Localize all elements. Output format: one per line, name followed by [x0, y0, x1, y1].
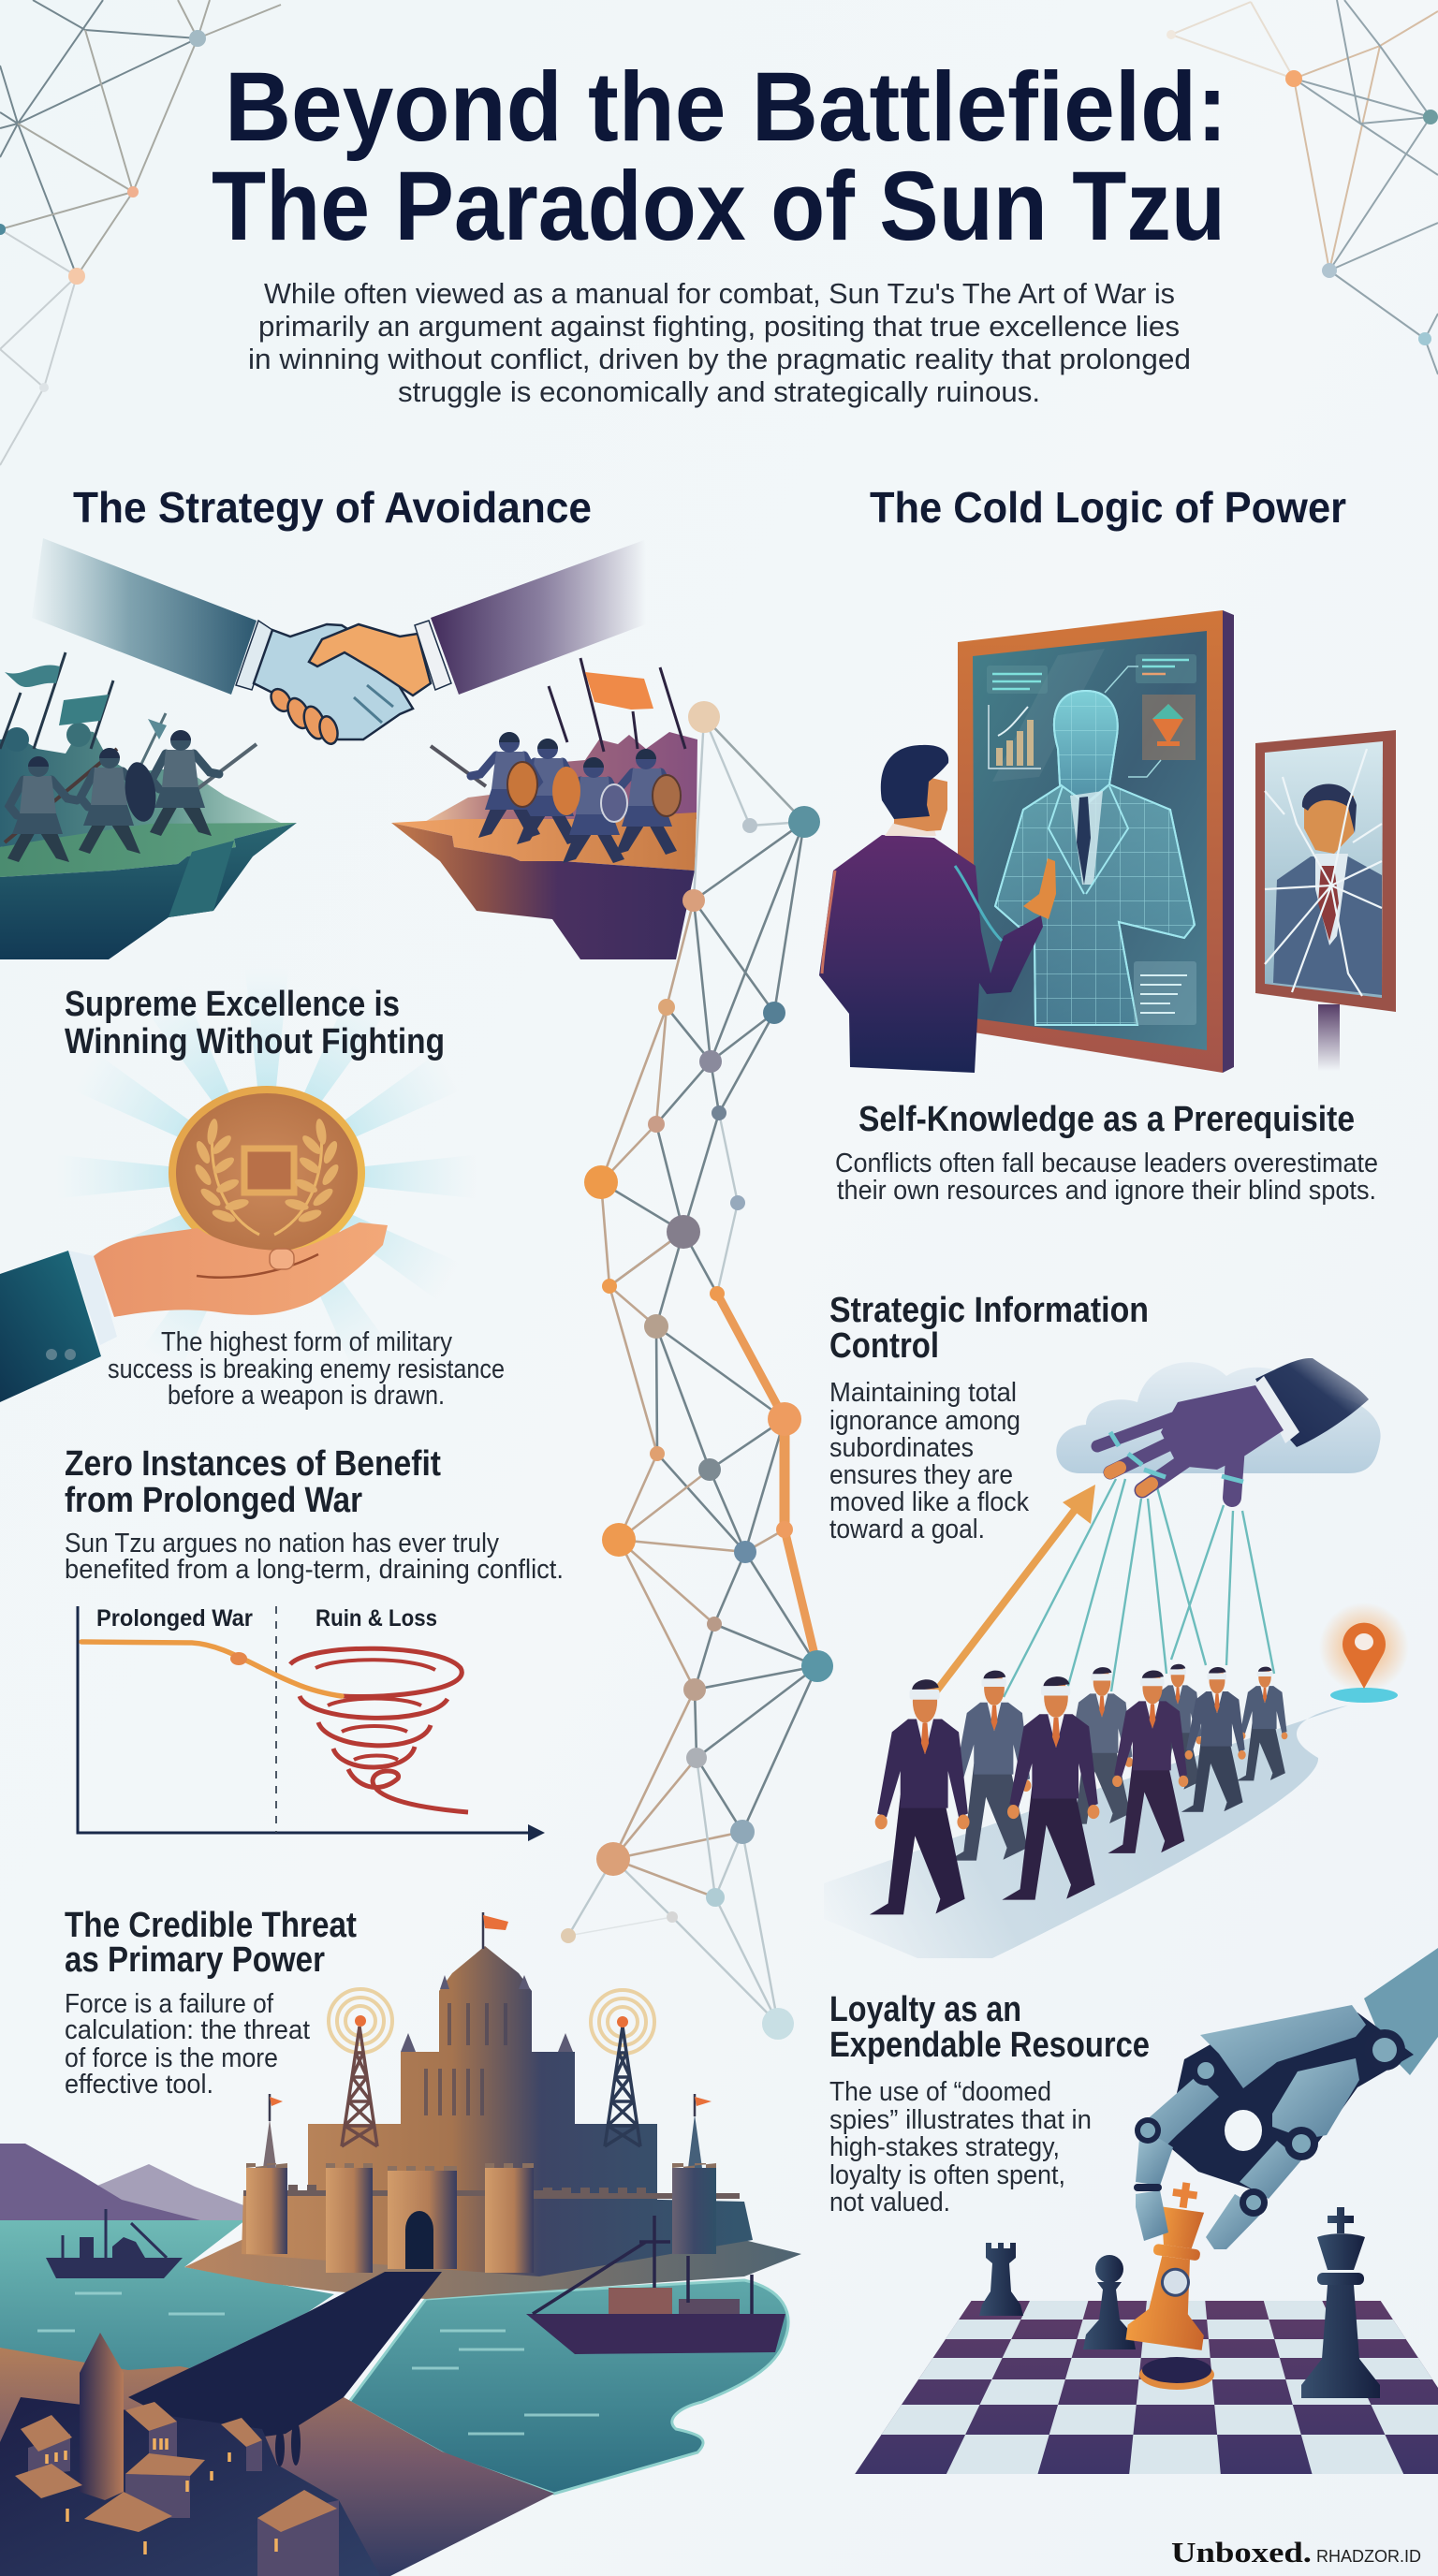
castle	[242, 1912, 753, 2276]
network: top-left corner	[0, 0, 281, 465]
chart labels: Prolonged War	[96, 1605, 253, 1632]
illustration: puppet hand and blindfolded men	[824, 1358, 1409, 1958]
illustration: coin in hand	[0, 961, 482, 1402]
open hand	[0, 1222, 388, 1402]
text: strategic information control: toward a goal.	[829, 1515, 985, 1544]
watermark: RHADZOR.ID	[1316, 2547, 1421, 2566]
text: credible threat	[65, 1906, 357, 2100]
text: loyalty: Expendable Resource	[829, 2026, 1150, 2065]
text: strategic information control: moved like a flock	[829, 1487, 1029, 1517]
left water	[0, 2220, 334, 2397]
goal pin	[1319, 1603, 1409, 1703]
central network graph	[561, 701, 833, 2040]
text: strategic information control: Maintaining total	[829, 1378, 1017, 1408]
spiral	[290, 1648, 468, 1812]
left radio tower	[329, 1989, 392, 2146]
text: self-knowledge: Self-Knowledge as a Prerequisite	[858, 1100, 1355, 1139]
text: zero instances: Zero Instances of Benefit	[65, 1444, 441, 1484]
chart labels	[96, 1605, 437, 1632]
heading: left column: The Strategy of Avoidance	[73, 483, 592, 532]
right water	[349, 2280, 788, 2494]
text: strategic information control: subordinates	[829, 1433, 974, 1463]
text: supreme excellence body: success is breaking enemy resistance	[108, 1354, 505, 1384]
text: credible threat: as Primary Power	[65, 1940, 325, 1980]
cloud	[1056, 1362, 1381, 1473]
text: self-knowledge: Conflicts often fall because leaders overestimate	[835, 1149, 1378, 1178]
intro text: struggle is economically and strategically ruinous.	[398, 375, 1040, 408]
king shadow	[1139, 2357, 1214, 2390]
text: zero instances: benefited from a long-term, draining conflict.	[65, 1555, 564, 1585]
black rook	[979, 2243, 1023, 2316]
man looking in mirror	[819, 745, 1056, 1073]
robot hand	[1134, 1948, 1438, 2249]
orange king piece	[1125, 2177, 1225, 2350]
text: supreme excellence body: before a weapon is drawn.	[168, 1381, 445, 1411]
title	[212, 52, 1227, 261]
title: The Paradox of Sun Tzu	[212, 152, 1225, 261]
right radio tower	[591, 1990, 654, 2146]
light rays	[51, 961, 482, 1374]
heading: right column: The Cold Logic of Power	[870, 483, 1346, 532]
orange line	[81, 1642, 342, 1696]
right ship	[526, 2216, 785, 2354]
text: zero instances	[65, 1444, 564, 1585]
intro text: in winning without conflict, driven by the pragmatic reality that prolonged	[248, 343, 1191, 375]
text: credible threat: effective tool.	[65, 2070, 213, 2100]
text: strategic information control: Control	[829, 1326, 939, 1366]
axis arrow	[528, 1824, 545, 1841]
coin	[169, 1086, 365, 1260]
title: Beyond the Battlefield:	[225, 52, 1227, 162]
puppet strings	[1004, 1479, 1274, 1703]
right army soldiers	[471, 732, 681, 863]
text: loyalty: high-stakes strategy,	[829, 2132, 1060, 2162]
text: strategic information control	[829, 1291, 1149, 1544]
intro text: primarily an argument against fighting, positing that true excellence lies	[258, 310, 1180, 343]
left army cliff	[0, 723, 297, 959]
right army cliff	[391, 732, 697, 959]
text: supreme excellence heading: Winning Without Fighting	[65, 1022, 445, 1061]
text: supreme excellence body: The highest form of military	[161, 1327, 452, 1357]
intro text: While often viewed as a manual for combat, Sun Tzu's The Art of War is	[264, 277, 1175, 310]
text: zero instances: from Prolonged War	[65, 1481, 362, 1520]
handshake	[32, 538, 663, 746]
text: strategic information control: ensures they are	[829, 1460, 1013, 1490]
town	[0, 2333, 380, 2576]
network: top-right corner	[1167, 0, 1438, 374]
text: loyalty	[829, 1990, 1150, 2217]
text: strategic information control: Strategic Information	[829, 1291, 1149, 1330]
left army banners	[0, 652, 257, 842]
black pawn	[1083, 2255, 1136, 2349]
watermark	[1171, 2536, 1421, 2569]
illustration: chessboard and robot hand	[855, 1948, 1438, 2474]
text: strategic information control: ignorance among	[829, 1406, 1020, 1436]
text: loyalty: The use of “doomed	[829, 2077, 1051, 2107]
orange arrow	[930, 1485, 1095, 1700]
watermark: Unboxed.	[1171, 2536, 1312, 2569]
axes	[78, 1606, 534, 1833]
water ripples	[37, 2293, 599, 2434]
text: credible threat: Force is a failure of	[65, 1989, 274, 2019]
right army banner	[431, 658, 685, 786]
illustration: castle, harbour and town	[0, 1912, 801, 2576]
text: self-knowledge	[835, 1100, 1378, 1206]
text: loyalty: not valued.	[829, 2188, 950, 2217]
text: credible threat: calculation: the threat	[65, 2015, 310, 2045]
text: credible threat: of force is the more	[65, 2043, 278, 2073]
illustration: two armies on cliffs	[0, 538, 697, 959]
chessboard	[855, 2301, 1438, 2474]
large mirror	[958, 610, 1234, 1073]
blindfolded men	[870, 1664, 1287, 1914]
text: loyalty: Loyalty as an	[829, 1990, 1021, 2029]
left ship	[46, 2209, 183, 2278]
text: supreme excellence heading: Supreme Excellence is	[65, 985, 400, 1024]
small cracked mirror	[1255, 730, 1396, 1071]
intro text	[248, 277, 1191, 408]
left army soldiers	[7, 730, 219, 862]
text: self-knowledge: their own resources and ignore their blind spots.	[837, 1176, 1376, 1206]
road	[824, 1705, 1348, 1958]
hologram document panel	[1134, 961, 1196, 1025]
puppet master hand	[1097, 1358, 1369, 1498]
dark road	[128, 2272, 442, 2443]
text: loyalty: spies” illustrates that in	[829, 2105, 1092, 2135]
chart: prolonged war spiral	[78, 1605, 545, 1841]
text: loyalty: loyalty is often spent,	[829, 2160, 1065, 2190]
lower shore	[0, 2348, 554, 2576]
island	[184, 2240, 801, 2299]
text: credible threat: The Credible Threat	[65, 1906, 357, 1945]
black king piece	[1301, 2207, 1380, 2398]
chart labels: Ruin & Loss	[315, 1605, 437, 1632]
text: supreme excellence body	[108, 1327, 505, 1411]
text: supreme excellence heading	[65, 985, 445, 1061]
text: zero instances: Sun Tzu argues no nation has ever truly	[65, 1529, 499, 1559]
hologram figure	[995, 691, 1195, 1025]
mountains	[0, 2144, 246, 2220]
illustration: two mirrors	[819, 610, 1396, 1073]
